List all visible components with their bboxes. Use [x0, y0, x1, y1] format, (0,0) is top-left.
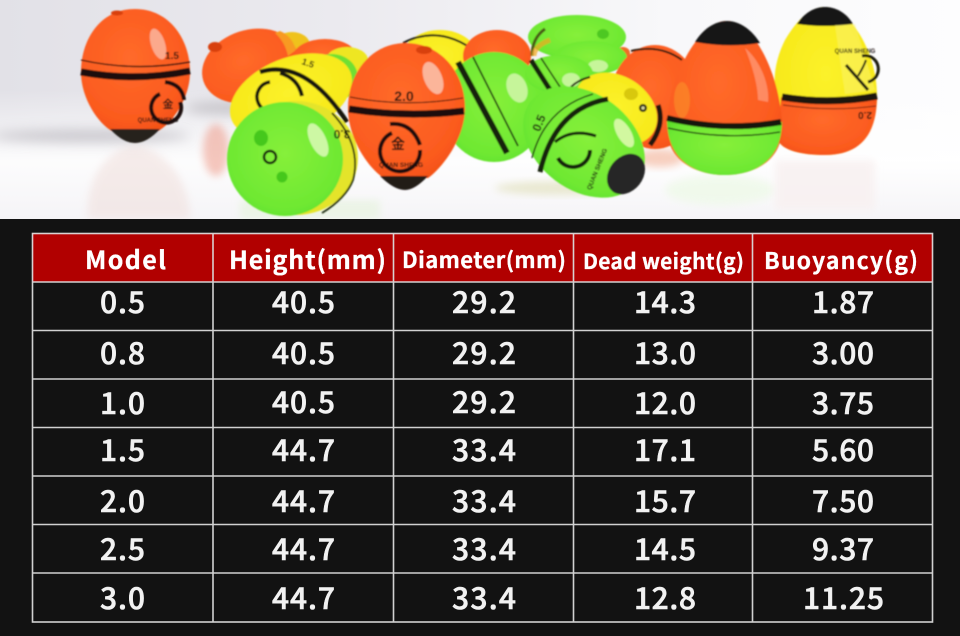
- float: orange lying back: [192, 17, 310, 115]
- table panel background: [0, 219, 960, 636]
- float: orange and green egg: [667, 21, 782, 175]
- float: green small centre: [525, 55, 593, 93]
- float: orange 2.0: [348, 43, 465, 190]
- float: yellow and orange egg right: [775, 7, 878, 155]
- row 2.5: [100, 525, 874, 569]
- photo of fishing floats: [81, 7, 878, 221]
- row 1.0: 3.75: [812, 379, 874, 423]
- float: green 0.5 front: QUAN SHENG: [586, 148, 609, 191]
- row 1.0: 40.5: [272, 378, 335, 422]
- float: green 0.5 front: [502, 63, 666, 221]
- float: green 0.5 front: 0.5: [529, 112, 549, 133]
- row 3.0: [100, 574, 884, 618]
- float: orange 1.5 left standing: 1.5: [165, 51, 179, 62]
- float: orange 2.0: 2.0: [394, 88, 414, 104]
- row 3.0: 11.25: [803, 574, 884, 618]
- float: orange 2.0: QUAN SHENG: [379, 162, 423, 169]
- table data rows: [100, 278, 884, 618]
- row 0.5: 0.5: [100, 278, 145, 322]
- row 0.8: 13.0: [634, 329, 696, 373]
- float: orange 1.5 left standing: QUAN SHENG: [138, 118, 179, 124]
- row 2.0: 2.0: [100, 477, 145, 521]
- row 1.0: [100, 378, 874, 423]
- float: yellow back centre: [402, 30, 478, 86]
- row 0.5: 29.2: [452, 278, 516, 322]
- row 3.0: 44.7: [272, 574, 335, 618]
- float: green lying centre: [442, 52, 546, 162]
- row 2.5: 9.37: [812, 525, 874, 569]
- row 0.5: [100, 278, 874, 322]
- row 3.0: 3.0: [100, 574, 145, 618]
- float: orange behind right: [611, 45, 699, 149]
- row 3.0: 12.8: [634, 574, 696, 618]
- header: Diameter(mm): Diameter(mm): [402, 243, 566, 275]
- row 1.0: 12.0: [634, 379, 696, 423]
- float: green back top: [528, 15, 626, 59]
- float: green 3.0: 3.0: [333, 127, 350, 141]
- float: green second row: [553, 41, 630, 75]
- floor shadows and reflections: [0, 102, 875, 219]
- row 0.8: 0.8: [100, 329, 145, 373]
- row 2.5: 2.5: [100, 525, 145, 569]
- row 2.5: 33.4: [452, 525, 516, 569]
- row 1.5: 1.5: [100, 426, 145, 470]
- float: orange back centre: [463, 30, 531, 82]
- float: yellow 1.5: [217, 37, 365, 155]
- row 0.5: 14.3: [634, 278, 696, 322]
- float: orange 1.5 left standing: 金: [162, 97, 174, 111]
- header: Height(mm): Height(mm): [229, 241, 386, 277]
- row 2.5: 44.7: [272, 525, 335, 569]
- row 1.0: 1.0: [100, 379, 145, 423]
- row 0.5: 1.87: [812, 278, 874, 322]
- row 0.8: 29.2: [452, 329, 516, 373]
- header: Buoyancy(g): Buoyancy(g): [764, 242, 918, 276]
- row 0.8: 3.00: [812, 329, 874, 373]
- float: small yellow back: [326, 47, 368, 73]
- float: yellow small right: [561, 58, 671, 160]
- row 2.5: 14.5: [634, 525, 696, 569]
- row 1.5: [100, 426, 874, 470]
- row 1.5: 17.1: [634, 426, 696, 470]
- row 1.5: 44.7: [272, 426, 335, 470]
- row 3.0: 33.4: [452, 574, 516, 618]
- row 2.0: 33.4: [452, 477, 516, 521]
- row 0.8: 40.5: [272, 329, 335, 373]
- float: yellow and orange egg right: 2.0: [858, 109, 872, 120]
- row 1.0: 29.2: [452, 378, 516, 422]
- row 1.5: 33.4: [452, 426, 516, 470]
- float: green 3.0: [227, 101, 358, 216]
- table header row: [32, 233, 933, 282]
- float: green behind yellow: [306, 54, 358, 102]
- row 2.0: 44.7: [272, 477, 335, 521]
- header: Model: Model: [85, 241, 166, 277]
- row 2.0: 15.7: [634, 477, 696, 521]
- float: yellow and orange egg right: QUAN SHENG: [835, 49, 876, 55]
- photo background: [0, 0, 960, 219]
- float: orange 1.5 left standing: [81, 9, 190, 143]
- row 2.0: 7.50: [812, 477, 874, 521]
- float: orange 2.0: 金: [391, 136, 405, 152]
- row 2.0: [100, 477, 874, 521]
- row 0.5: 40.5: [272, 278, 335, 322]
- table grid lines: [32, 233, 933, 622]
- row 1.5: 5.60: [812, 426, 874, 470]
- header: Dead weight(g): Dead weight(g): [583, 246, 744, 276]
- row 0.8: [100, 329, 874, 373]
- float: small orange back: [293, 39, 357, 75]
- float: yellow 1.5: 1.5: [300, 56, 316, 70]
